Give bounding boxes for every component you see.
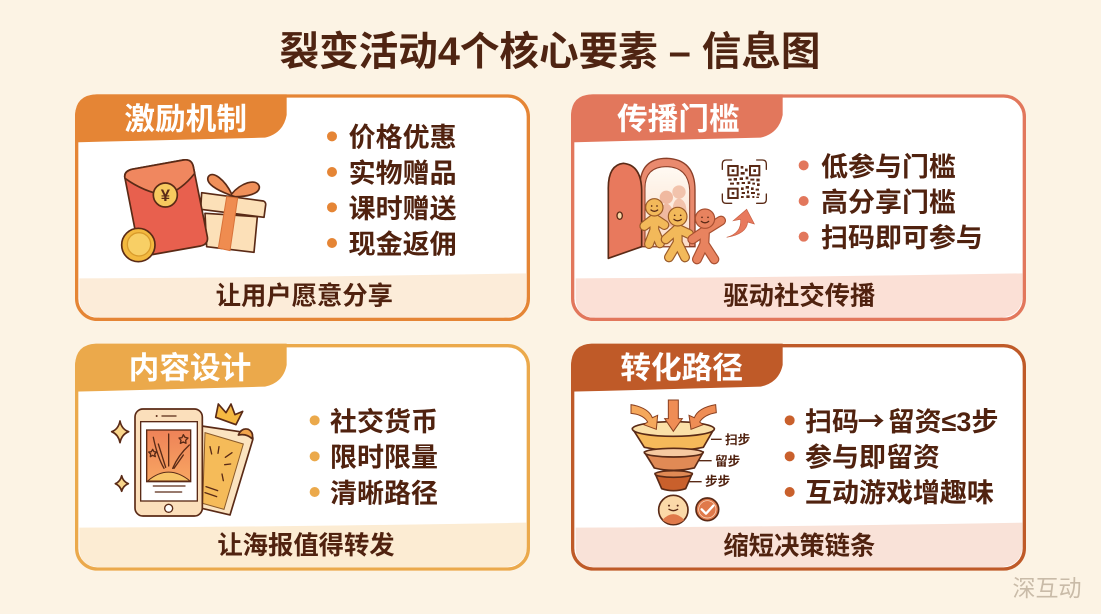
heading: 传播门槛: 传播门槛 <box>617 102 740 136</box>
bullet list <box>799 152 983 253</box>
bullet list: 留资≤3步 <box>888 407 998 437</box>
bullet list: 价格优惠 <box>349 123 457 153</box>
icon: three arrows <box>631 400 716 431</box>
funnel labels: 留步 <box>715 453 740 468</box>
funnel labels: 扫步 <box>725 432 750 447</box>
bullet list: 限时限量 <box>330 443 438 473</box>
bullet list: 扫码 <box>805 407 859 437</box>
icon: sparkle small <box>115 476 128 491</box>
icon: poster <box>202 426 253 515</box>
bullet list: 扫码即可参与 <box>821 223 983 253</box>
icon: open door with people <box>608 158 721 259</box>
arrow <box>727 209 754 237</box>
bullet list: 参与即留资 <box>805 442 940 472</box>
bullet list: 高分享门槛 <box>821 187 956 217</box>
person: coral right <box>692 209 721 259</box>
bullet list: 社交货币 <box>330 407 438 437</box>
caption: 让用户愿意分享 <box>216 282 393 311</box>
bullet list <box>785 400 998 508</box>
bullet list: 课时赠送 <box>349 194 457 224</box>
icon: funnel <box>632 422 722 491</box>
bullet list: → <box>858 400 885 439</box>
panel: 内容设计 <box>75 344 528 569</box>
person: yellow middle <box>666 207 689 257</box>
heading: 内容设计: 内容设计 <box>129 352 251 386</box>
heading: 激励机制: 激励机制 <box>124 102 247 136</box>
icon: gold coin <box>122 228 155 262</box>
title: 裂变活动4个核心要素 – 信息图 <box>280 30 820 74</box>
bullet list: 低参与门槛 <box>821 152 956 182</box>
icon: red envelope <box>125 160 208 255</box>
caption: 驱动社交传播 <box>723 283 875 311</box>
icon: QR code <box>722 160 766 203</box>
bullet list: 清晰路径 <box>330 478 438 508</box>
bullet list: 现金返佣 <box>349 229 457 259</box>
icon: gift box <box>201 175 266 252</box>
icon: phone <box>135 409 202 516</box>
caption: 缩短决策链条 <box>723 532 875 560</box>
bullet list: 互动游戏增趣味 <box>805 478 994 508</box>
icon: red envelope: ¥ <box>161 186 171 205</box>
watermark: 深互动 <box>1012 575 1082 601</box>
heading: 转化路径: 转化路径 <box>620 352 743 386</box>
icon: check badge <box>696 498 719 521</box>
bullet list <box>310 407 438 508</box>
caption: 让海报值得转发 <box>217 532 395 560</box>
person: yellow left <box>644 199 664 244</box>
bullet list: 实物赠品 <box>349 158 457 188</box>
bullet list <box>327 123 457 259</box>
panel: 传播门槛 <box>571 94 1024 319</box>
icon: smiley face <box>659 495 688 525</box>
panel: 激励机制 <box>75 94 528 319</box>
panel: 转化路径 <box>571 344 1024 569</box>
icon: crown <box>216 404 243 425</box>
icon: sparkle large <box>112 421 129 443</box>
funnel labels <box>705 432 750 489</box>
funnel labels: 步步 <box>705 474 730 489</box>
